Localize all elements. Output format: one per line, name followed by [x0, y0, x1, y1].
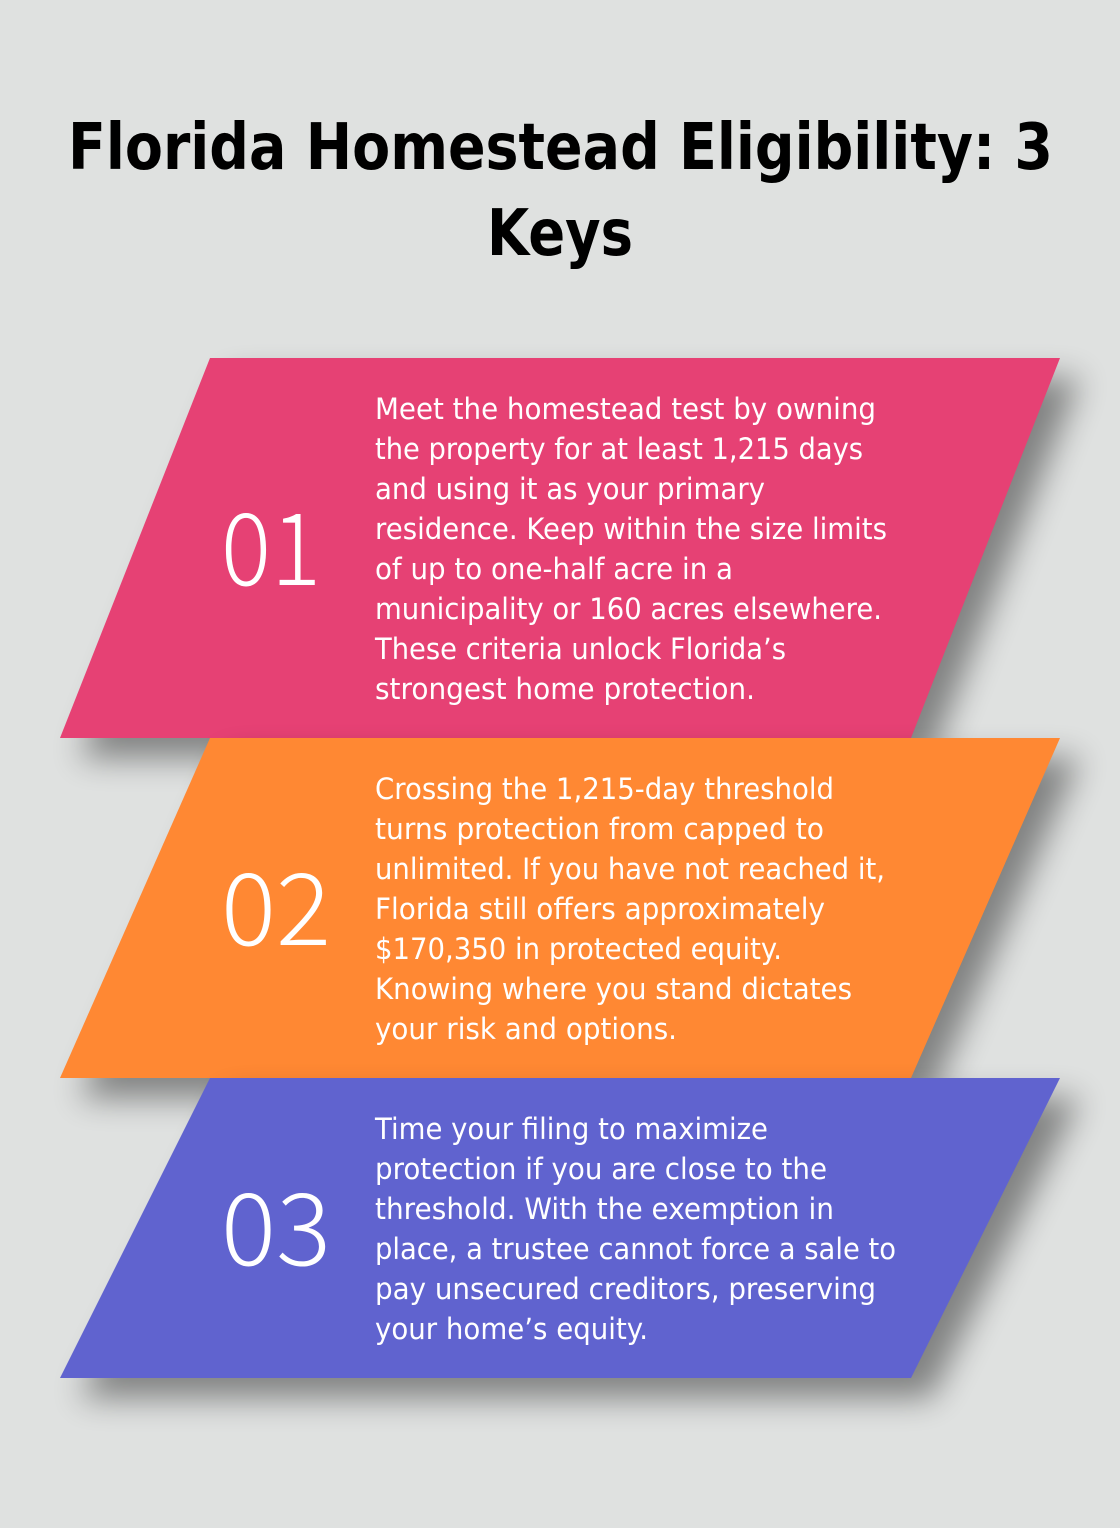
- text block 3: threshold. With the exemption in: [375, 1192, 834, 1226]
- text block 1: [374, 392, 887, 706]
- number 01: 01: [221, 469, 321, 614]
- text block 2: [375, 772, 885, 1046]
- text block 2: your risk and options.: [375, 1012, 677, 1046]
- text block 1: municipality or 160 acres elsewhere.: [375, 592, 882, 626]
- text block 2: Crossing the 1,215-day threshold: [375, 772, 834, 806]
- title: Keys: [487, 197, 633, 271]
- text block 3: [374, 1112, 896, 1346]
- text block 1: Meet the homestead test by owning: [375, 392, 876, 426]
- panel: key 1: [60, 358, 1080, 758]
- title: [68, 111, 1053, 271]
- text block 1: and using it as your primary: [375, 472, 765, 506]
- text block 1: strongest home protection.: [375, 672, 755, 706]
- number 02: 02: [221, 829, 331, 974]
- text block 3: pay unsecured creditors, preserving: [375, 1272, 876, 1306]
- text block 2: unlimited. If you have not reached it,: [375, 852, 885, 886]
- text block 1: the property for at least 1,215 days: [375, 432, 863, 466]
- text block 1: These criteria unlock Florida’s: [374, 632, 786, 666]
- text block 2: $170,350 in protected equity.: [375, 932, 782, 966]
- text block 2: turns protection from capped to: [375, 812, 824, 846]
- text block 3: protection if you are close to the: [375, 1152, 827, 1186]
- panel: key 2: [60, 738, 1080, 1098]
- number 03: 03: [221, 1149, 331, 1294]
- panel: key 3: [60, 1078, 1080, 1398]
- text block 1: of up to one-half acre in a: [375, 552, 733, 586]
- text block 1: residence. Keep within the size limits: [375, 512, 887, 546]
- text block 2: Florida still offers approximately: [375, 892, 825, 926]
- text block 3: Time your filing to maximize: [374, 1112, 768, 1146]
- text block 3: your home’s equity.: [375, 1312, 648, 1346]
- text block 2: Knowing where you stand dictates: [375, 972, 852, 1006]
- text block 3: place, a trustee cannot force a sale to: [375, 1232, 896, 1266]
